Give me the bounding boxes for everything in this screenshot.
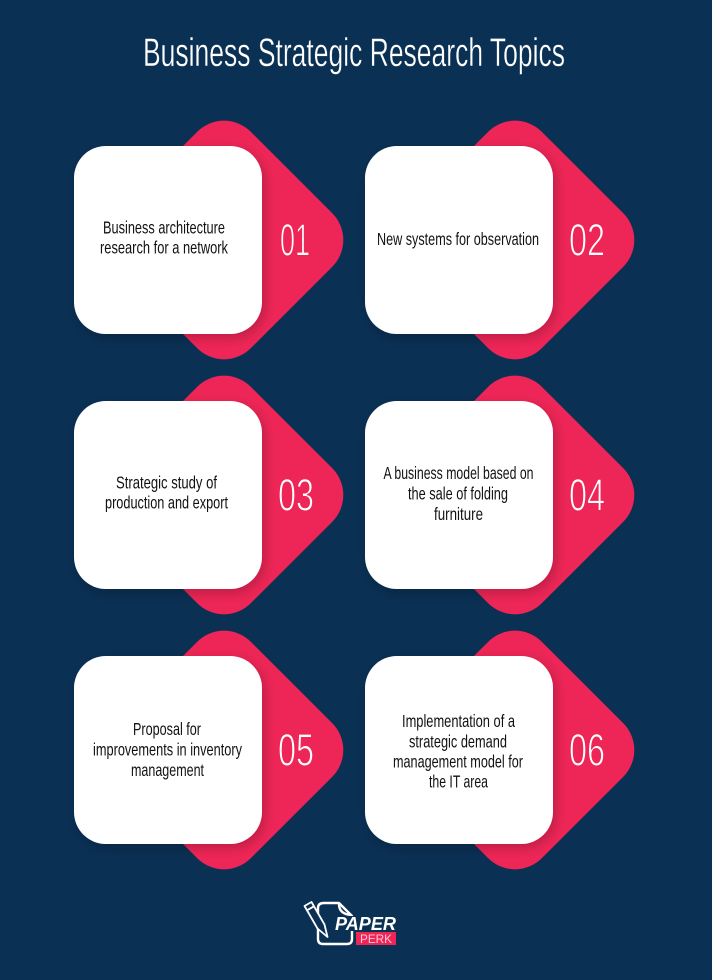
text 04 xyxy=(384,463,534,524)
wordmark: PAPER: PAPER xyxy=(335,914,396,934)
white card 01 xyxy=(74,146,262,334)
panel: topic 05 xyxy=(74,615,359,885)
number 03: 03 xyxy=(278,470,314,520)
text 06: the IT area xyxy=(429,772,488,792)
wordmark backing xyxy=(332,916,398,931)
badge: PERK: PERK xyxy=(360,932,392,946)
red diamond 02 xyxy=(380,105,650,375)
red diamond 01 xyxy=(89,105,359,375)
white card 04 xyxy=(365,401,553,589)
text 03: production and export xyxy=(105,492,228,512)
icon: document outline xyxy=(318,903,352,944)
number 01: 01 xyxy=(280,214,310,266)
text 05: Proposal for xyxy=(133,719,201,739)
panel: topic 03 xyxy=(74,360,359,630)
number 02: 02 xyxy=(569,214,605,266)
number 04: 04 xyxy=(569,470,605,520)
text 04: furniture xyxy=(434,504,483,524)
panel: topic 01 xyxy=(74,105,359,375)
text 02: New systems for observation xyxy=(377,229,539,249)
number 05: 05 xyxy=(278,724,314,776)
panel: topic 06 xyxy=(365,615,650,885)
red diamond 04 xyxy=(380,360,650,630)
text 04: the sale of folding xyxy=(408,484,508,504)
red diamond 06 xyxy=(380,615,650,885)
text 05: management xyxy=(131,760,204,780)
red diamond 03 xyxy=(89,360,359,630)
text 01: research for a network xyxy=(100,238,228,258)
text 04: A business model based on xyxy=(384,463,534,483)
icon: pencil xyxy=(304,902,328,937)
text 01: Business architecture xyxy=(103,218,225,238)
white card 03 xyxy=(74,401,262,589)
text 05 xyxy=(93,719,242,780)
red diamond 05 xyxy=(89,615,359,885)
text 06: strategic demand xyxy=(409,732,507,752)
text 06: management model for xyxy=(393,752,523,772)
white card 02 xyxy=(365,146,553,334)
text 01 xyxy=(100,218,228,258)
text 05: improvements in inventory xyxy=(93,740,242,760)
number 06: 06 xyxy=(569,724,605,776)
text 03 xyxy=(105,472,228,512)
white card 06 xyxy=(365,656,553,844)
text 03: Strategic study of xyxy=(116,472,217,492)
text 06: Implementation of a xyxy=(402,711,515,731)
panel: topic 02 xyxy=(365,105,650,375)
text 06 xyxy=(393,711,523,792)
panel: topic 04 xyxy=(365,360,650,630)
logo: Paper Perk xyxy=(304,902,398,946)
white card 05 xyxy=(74,656,262,844)
